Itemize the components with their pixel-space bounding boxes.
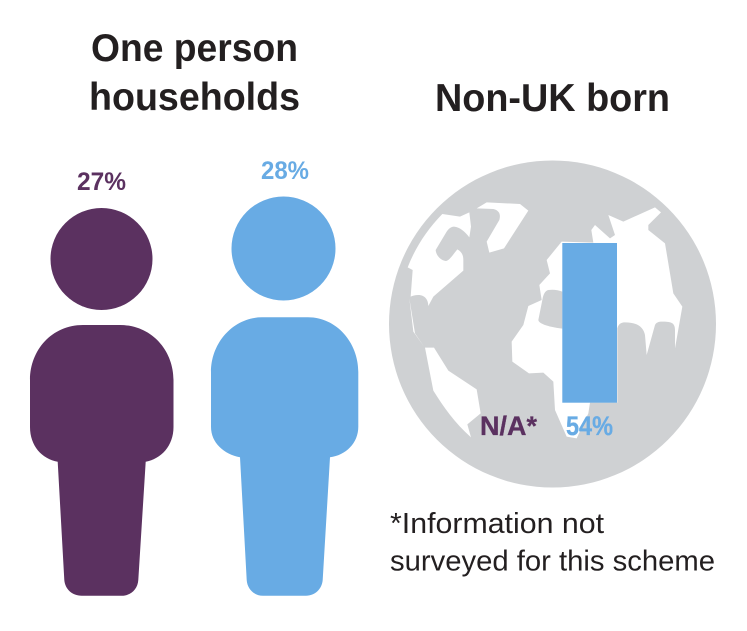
- heading: One person households: [89, 27, 300, 119]
- icon: blue person: [211, 196, 358, 596]
- label: 54%: 54%: [566, 411, 613, 441]
- icon: globe: [389, 160, 716, 488]
- label: 27%: 27%: [77, 168, 126, 196]
- label: 28%: 28%: [261, 157, 309, 185]
- footnote: surveyed for this scheme: [390, 546, 715, 578]
- label: N/A*: N/A*: [480, 411, 537, 441]
- icon: purple person: [30, 208, 174, 596]
- heading: One person households: households: [89, 76, 300, 119]
- footnote: *Information not: [390, 508, 604, 540]
- heading: Non-UK born: Non-UK born: [435, 77, 670, 120]
- footnote: [390, 508, 715, 578]
- heading: One person households: One person: [91, 27, 298, 70]
- bar: 54%: [562, 243, 617, 403]
